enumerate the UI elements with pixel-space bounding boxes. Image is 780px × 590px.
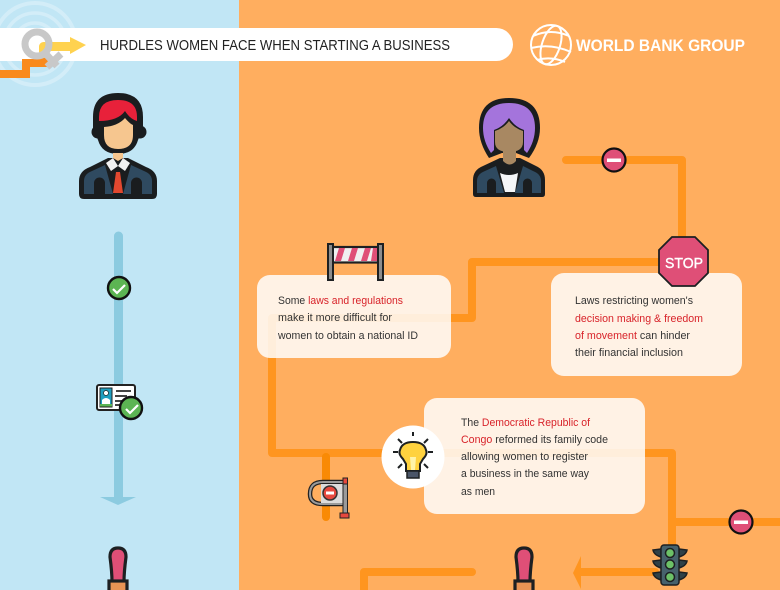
icon: light bulb on white circle — [382, 426, 444, 488]
icon: minus sign top — [602, 148, 626, 172]
women path lines — [272, 160, 780, 590]
text block: Congo reform — [461, 417, 608, 498]
text block: Congo reform: The Democratic Republic of — [461, 417, 591, 429]
icon: venus symbol with arrow — [0, 32, 86, 74]
text block: Congo reform: allowing women to register — [461, 451, 588, 463]
logo: World Bank Group — [531, 23, 745, 67]
icon: globe — [531, 23, 571, 67]
text block: restricting laws: Laws restricting women's — [575, 295, 694, 307]
text block: Congo reform: as men — [461, 486, 495, 498]
header title: HURDLES WOMEN FACE WHEN STARTING A BUSINESS — [100, 38, 450, 54]
panel: national ID text box — [257, 275, 451, 358]
icon: stop sign — [659, 237, 708, 286]
icon: pin marker right — [515, 548, 533, 590]
text block: Congo reform: Congo reformed its family code — [461, 434, 608, 446]
logo wordmark: WORLD BANK GROUP — [576, 37, 745, 55]
panel: men background — [0, 0, 239, 590]
icon: woman with purple hair — [473, 98, 545, 197]
text block: laws and regulations — [277, 295, 418, 342]
text block: laws and regulations: make it more difficult for — [278, 312, 392, 324]
text block: laws and regulations: Some laws and regulations — [278, 295, 404, 307]
icon: ID card with check — [97, 385, 142, 419]
header banner — [0, 28, 513, 61]
text block: restricting laws — [575, 295, 703, 359]
panel: women background — [239, 0, 780, 590]
icon: pin marker left — [109, 548, 127, 590]
decorative maze emblem — [0, 3, 76, 85]
text block: restricting laws: their financial inclusion — [575, 347, 683, 359]
panel: restrictions text box — [551, 273, 742, 376]
arrow head: women path — [573, 556, 581, 589]
men path arrow — [100, 232, 136, 505]
icon: turnstile gate — [310, 478, 349, 518]
icon: road barrier — [328, 244, 383, 280]
text block: restricting laws: decision making & freedom — [575, 313, 703, 325]
icon: check mark on path — [108, 277, 130, 299]
icon: minus sign right — [730, 510, 752, 534]
text block: restricting laws: of movement can hinder — [575, 330, 690, 342]
text block: Congo reform: a business in the same way — [461, 468, 590, 480]
panel: Congo reform text box — [424, 398, 645, 514]
icon: traffic light — [653, 545, 687, 585]
icon: stop sign: STOP — [665, 255, 703, 272]
icon: man in suit — [79, 93, 157, 199]
text block: laws and regulations: women to obtain a national ID — [277, 330, 418, 342]
